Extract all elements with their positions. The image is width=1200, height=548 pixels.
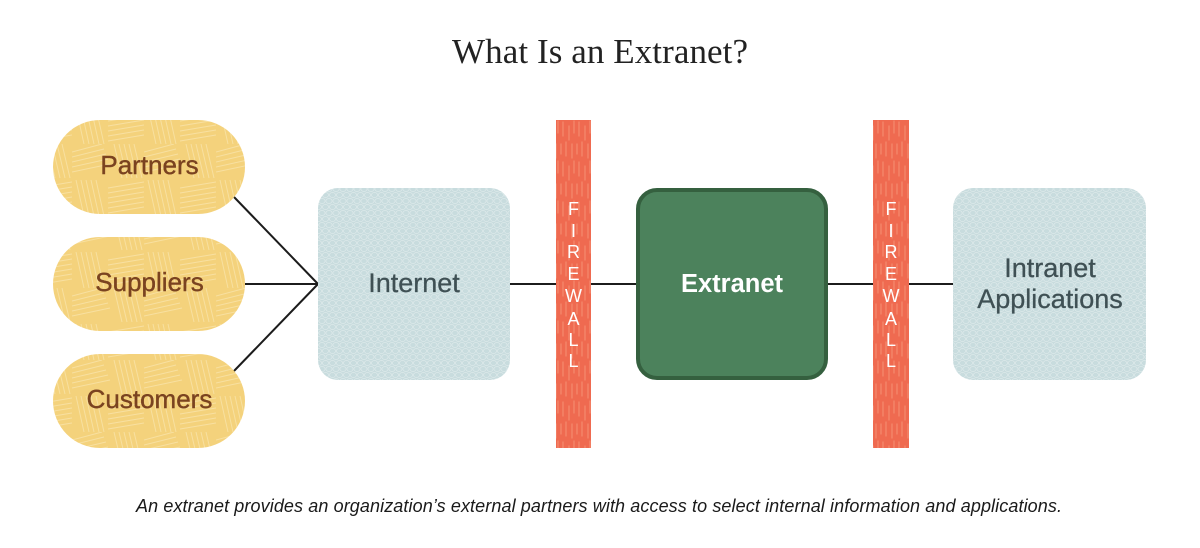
- firewall: left: L: [568, 330, 579, 350]
- firewall: right: R: [884, 242, 898, 262]
- pill: Partners: [53, 120, 245, 214]
- firewall: left: R: [567, 242, 580, 262]
- pill: Suppliers: Suppliers: [95, 267, 204, 297]
- box: Intranet Applications: Applications: [977, 284, 1123, 314]
- firewall: left: I: [571, 221, 576, 241]
- box: Intranet Applications: Intranet: [1004, 253, 1096, 283]
- pill: Partners: Partners: [100, 150, 199, 180]
- pill: Suppliers: [53, 237, 245, 331]
- firewall: right: L: [886, 351, 896, 371]
- box: Internet: [318, 188, 510, 380]
- pill: Customers: [53, 354, 245, 448]
- firewall: right: L: [886, 330, 896, 350]
- firewall: left: L: [568, 351, 579, 371]
- box: Extranet: [638, 190, 826, 378]
- caption: An extranet provides an organization’s external partners with access to select internal information and applications.: [135, 496, 1062, 516]
- firewall: right: A: [885, 309, 897, 329]
- firewall: left: A: [567, 309, 580, 329]
- connector lines: [234, 197, 953, 371]
- firewall: right: E: [885, 264, 897, 284]
- firewall: left: W: [565, 286, 582, 306]
- firewall: right: W: [882, 286, 900, 306]
- firewall: right: I: [888, 221, 894, 241]
- firewall: right: [873, 120, 909, 448]
- title: What Is an Extranet?: [452, 32, 748, 71]
- firewall: left: E: [567, 264, 580, 284]
- firewall: right: F: [886, 199, 896, 219]
- firewall: left: [556, 120, 591, 448]
- firewall: left: F: [568, 199, 579, 219]
- box: Internet: Internet: [368, 268, 460, 298]
- box: Intranet Applications: [953, 188, 1146, 380]
- box: Extranet: Extranet: [681, 270, 784, 298]
- pill: Customers: Customers: [87, 384, 212, 414]
